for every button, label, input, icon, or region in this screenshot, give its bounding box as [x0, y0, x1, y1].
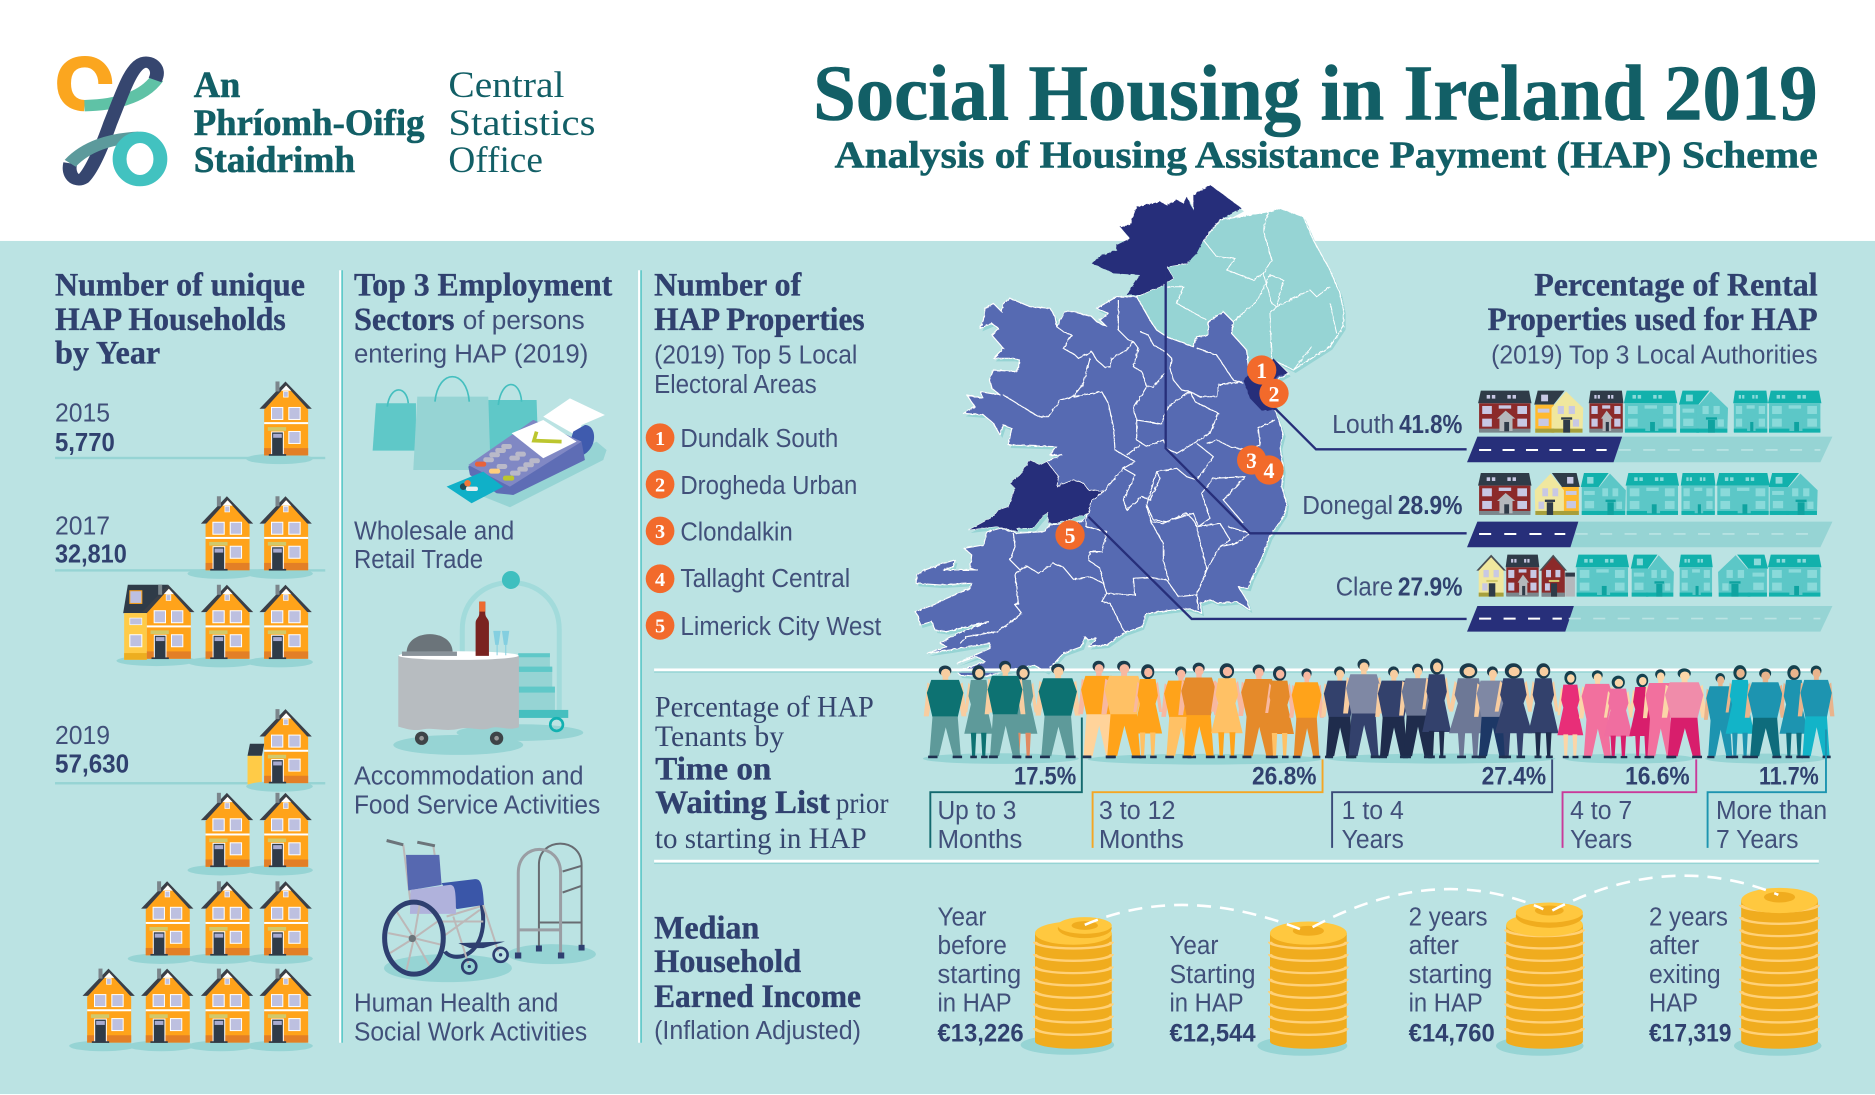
icon: CSO knot logo: [64, 62, 160, 181]
people: up to 3 months: [924, 661, 1080, 758]
housing row Louth: [1478, 391, 1821, 433]
stat 2019: 57,630: [55, 748, 129, 778]
title: [813, 51, 1818, 176]
Clare highlighted: [968, 460, 1103, 532]
coin stack 3: [1496, 902, 1584, 1056]
heading: Tenants by: [655, 720, 784, 753]
label accommodation: [354, 760, 600, 820]
label health: Human Health and: [354, 988, 558, 1018]
heading: (2019) Top 3 Local Authorities: [1491, 340, 1818, 370]
income 4 text: exiting: [1649, 959, 1721, 989]
income 3 text: 2 years: [1409, 902, 1488, 932]
bracket: up to 3 months: Months: [937, 824, 1022, 854]
income 4 text: after: [1649, 930, 1699, 960]
heading: Median: [654, 910, 759, 946]
label accommodation: Food Service Activities: [354, 790, 600, 820]
stat 2019: 2019: [55, 720, 110, 750]
people chart: [923, 659, 1834, 765]
housing row Donegal: [1478, 473, 1818, 515]
income 2 text: €12,544: [1169, 1020, 1256, 1048]
bracket: 4 to 7 years: [1563, 759, 1696, 854]
income 1 text: before: [937, 930, 1007, 960]
logo text English: Central: [448, 65, 564, 106]
panel: median household earned income: [654, 876, 1821, 1056]
label Clare: 27.9%: [1398, 572, 1462, 602]
logo text Irish: [194, 65, 425, 181]
list of top 5 areas: 5: [655, 616, 665, 638]
list of top 5 areas: Dundalk South: [680, 423, 838, 453]
map number badges: 5: [1065, 523, 1076, 548]
bracket: 1 to 4 years: 1 to 4: [1342, 795, 1404, 825]
label wholesale: Wholesale and: [354, 515, 514, 545]
heading: (2019) Top 5 Local: [654, 340, 857, 370]
stat 2015: 5,770: [55, 427, 115, 457]
bracket: up to 3 months: Up to 3: [937, 795, 1016, 825]
heading: Waiting List: [655, 784, 830, 820]
income 3 text: after: [1409, 930, 1459, 960]
subtitle: Analysis of Housing Assistance Payment (HAP) Scheme: [835, 134, 1818, 176]
bracket: 4 to 7 years: 4 to 7: [1570, 795, 1632, 825]
income 3 text: starting: [1409, 959, 1492, 989]
heading: prior: [836, 787, 889, 820]
list of top 5 areas: 2: [655, 474, 665, 496]
label Louth: [1332, 409, 1462, 439]
header: CSO logo: [64, 62, 596, 181]
heading: Properties used for HAP: [1488, 301, 1818, 337]
people: 1 to 4 years: [1321, 659, 1558, 758]
bracket: 4 to 7 years: Years: [1570, 824, 1632, 854]
map number badges: [1055, 355, 1289, 550]
income 4 text: [1649, 902, 1732, 1048]
stat 2017: 32,810: [55, 539, 127, 569]
Louth highlighted: [1243, 358, 1288, 411]
heading: [1488, 266, 1818, 370]
label Donegal: [1302, 490, 1462, 520]
map number badges: 4: [1263, 458, 1274, 483]
panel: percentage of rental properties used for HAP: [1302, 266, 1832, 632]
map number badges: 3: [1246, 448, 1257, 473]
stat 2019: [55, 720, 129, 778]
heading: [654, 266, 865, 399]
label Louth: 41.8%: [1399, 409, 1462, 439]
heading: Household: [654, 943, 801, 979]
heading: to starting in HAP: [655, 822, 867, 855]
houses 2019: [69, 709, 313, 1051]
label accommodation: Accommodation and: [354, 760, 584, 790]
logo text English: Statistics: [448, 103, 596, 144]
coin stack 1: [1021, 917, 1114, 1055]
bracket: up to 3 months: 17.5%: [1014, 763, 1076, 790]
coin stack 4: [1734, 888, 1821, 1056]
bracket: 4 to 7 years: 16.6%: [1625, 763, 1690, 790]
bracket: 1 to 4 years: [1332, 759, 1552, 854]
icon: hotel trolley with table: [393, 571, 583, 755]
people: 3 to 12 months: [1078, 661, 1324, 758]
bracket: 1 to 4 years: 27.4%: [1482, 763, 1546, 790]
heading: by Year: [55, 335, 160, 371]
income 3 text: €14,760: [1409, 1020, 1495, 1048]
heading: HAP Properties: [654, 301, 865, 337]
income 4 text: €17,319: [1649, 1020, 1732, 1048]
list of top 5 areas: 3: [655, 521, 665, 543]
stat 2015: [55, 398, 115, 457]
list of top 5 areas: 4: [655, 569, 665, 591]
panel: unique HAP households by year: [55, 266, 325, 1051]
icon: wheelchair and walking frame: [384, 841, 596, 982]
label Clare: [1336, 572, 1462, 602]
Donegal highlighted: [1092, 185, 1242, 295]
people: more than 7 years: [1704, 665, 1834, 758]
income 1 text: €13,226: [937, 1020, 1024, 1048]
income 2 text: [1169, 930, 1256, 1048]
income 4 text: 2 years: [1649, 902, 1728, 932]
income 2 text: Year: [1169, 930, 1219, 960]
year lines: [55, 457, 325, 784]
heading: (Inflation Adjusted): [654, 1015, 861, 1045]
logo text Irish: An: [194, 65, 241, 106]
houses 2017: [117, 496, 313, 667]
bracket: more than 7 years: More than: [1716, 795, 1827, 825]
section separators: [654, 668, 1819, 864]
heading: Electoral Areas: [654, 369, 817, 399]
panel: number of HAP properties: [646, 266, 882, 641]
bracket: up to 3 months: [930, 717, 1082, 854]
label Clare: Clare: [1336, 572, 1393, 602]
road Clare 27.9%: [1467, 606, 1832, 632]
heading: Sectors: [354, 301, 454, 337]
bracket: 1 to 4 years: Years: [1342, 824, 1404, 854]
logo text English: [448, 65, 596, 181]
heading: Number of unique: [55, 266, 305, 302]
list of top 5 areas: Drogheda Urban: [680, 470, 857, 500]
heading: Percentage of Rental: [1534, 266, 1818, 302]
panel: time on waiting list: [655, 659, 1834, 855]
stat 2015: 2015: [55, 398, 110, 428]
income 3 text: [1409, 902, 1495, 1048]
heading: Percentage of HAP: [655, 690, 874, 723]
heading: HAP Households: [55, 301, 286, 337]
map number badges: 1: [1256, 358, 1267, 383]
list of top 5 areas: [646, 423, 882, 641]
people: 4 to 7 years: [1557, 668, 1707, 758]
label health: [354, 988, 587, 1046]
list of top 5 areas: Clondalkin: [680, 517, 793, 547]
income 1 text: in HAP: [937, 988, 1012, 1018]
bracket: 3 to 12 months: 3 to 12: [1099, 795, 1175, 825]
stat 2017: [55, 511, 127, 569]
income 1 text: [938, 902, 1024, 1048]
road and housing rows: [1467, 391, 1832, 632]
houses 2015: [246, 381, 313, 464]
income 4 text: HAP: [1649, 988, 1698, 1018]
label wholesale: Retail Trade: [354, 544, 483, 574]
logo text Irish: Phríomh-Oifig: [194, 103, 425, 144]
heading: [354, 266, 612, 368]
heading: entering HAP (2019): [354, 338, 588, 368]
label wholesale: [354, 515, 514, 574]
income 1 text: Year: [937, 902, 987, 932]
housing row Clare: [1476, 555, 1821, 597]
map coast shadow: [917, 188, 1346, 680]
bracket: 3 to 12 months: 26.8%: [1252, 763, 1317, 790]
bracket: 3 to 12 months: [1093, 759, 1323, 854]
leader lines from map to roads: [1088, 265, 1467, 619]
income 1 text: starting: [937, 959, 1021, 989]
label Donegal: 28.9%: [1398, 490, 1462, 520]
heading: of persons: [463, 305, 585, 335]
panel: top 3 employment sectors: [354, 266, 612, 1046]
income 2 text: in HAP: [1169, 988, 1244, 1018]
income 3 text: in HAP: [1409, 988, 1483, 1018]
stat 2017: 2017: [55, 511, 110, 541]
heading: Number of: [654, 266, 802, 302]
logo text Irish: Staidrimh: [194, 140, 356, 181]
bracket: more than 7 years: 7 Years: [1716, 824, 1798, 854]
road Louth 41.8%: [1467, 437, 1832, 462]
heading: [55, 266, 305, 371]
coin stack 2: [1257, 921, 1347, 1056]
heading: [654, 910, 861, 1045]
heading: Top 3 Employment: [354, 266, 612, 302]
heading: Earned Income: [654, 978, 861, 1014]
column dividers: [339, 270, 642, 1043]
ground shadows: [923, 753, 1825, 765]
Northern Ireland: [1137, 208, 1343, 370]
road Donegal 28.9%: [1467, 522, 1832, 547]
list of top 5 areas: Limerick City West: [680, 611, 882, 641]
bracket: more than 7 years: 11.7%: [1759, 763, 1819, 790]
label Donegal: Donegal: [1302, 490, 1393, 520]
coin stacks: [1021, 876, 1821, 1056]
bracket: 3 to 12 months: Months: [1099, 824, 1184, 854]
logo text English: Office: [448, 140, 543, 181]
bracket: more than 7 years: [1708, 729, 1827, 854]
list of top 5 areas: 1: [655, 428, 665, 450]
dashed arcs between stacks: [1085, 876, 1778, 930]
teal background panel: [0, 241, 1875, 1094]
label Louth: Louth: [1332, 409, 1394, 439]
title: Social Housing in Ireland 2019: [813, 51, 1818, 138]
Republic of Ireland counties: [915, 185, 1343, 677]
map number badges: 2: [1268, 381, 1279, 406]
map of Ireland: [915, 185, 1467, 680]
icon: shopping bags and card terminal: [373, 377, 607, 507]
heading: [655, 690, 889, 855]
income 2 text: Starting: [1169, 959, 1256, 989]
heading: Time on: [655, 751, 771, 787]
label health: Social Work Activities: [354, 1016, 587, 1046]
list of top 5 areas: Tallaght Central: [680, 563, 850, 593]
